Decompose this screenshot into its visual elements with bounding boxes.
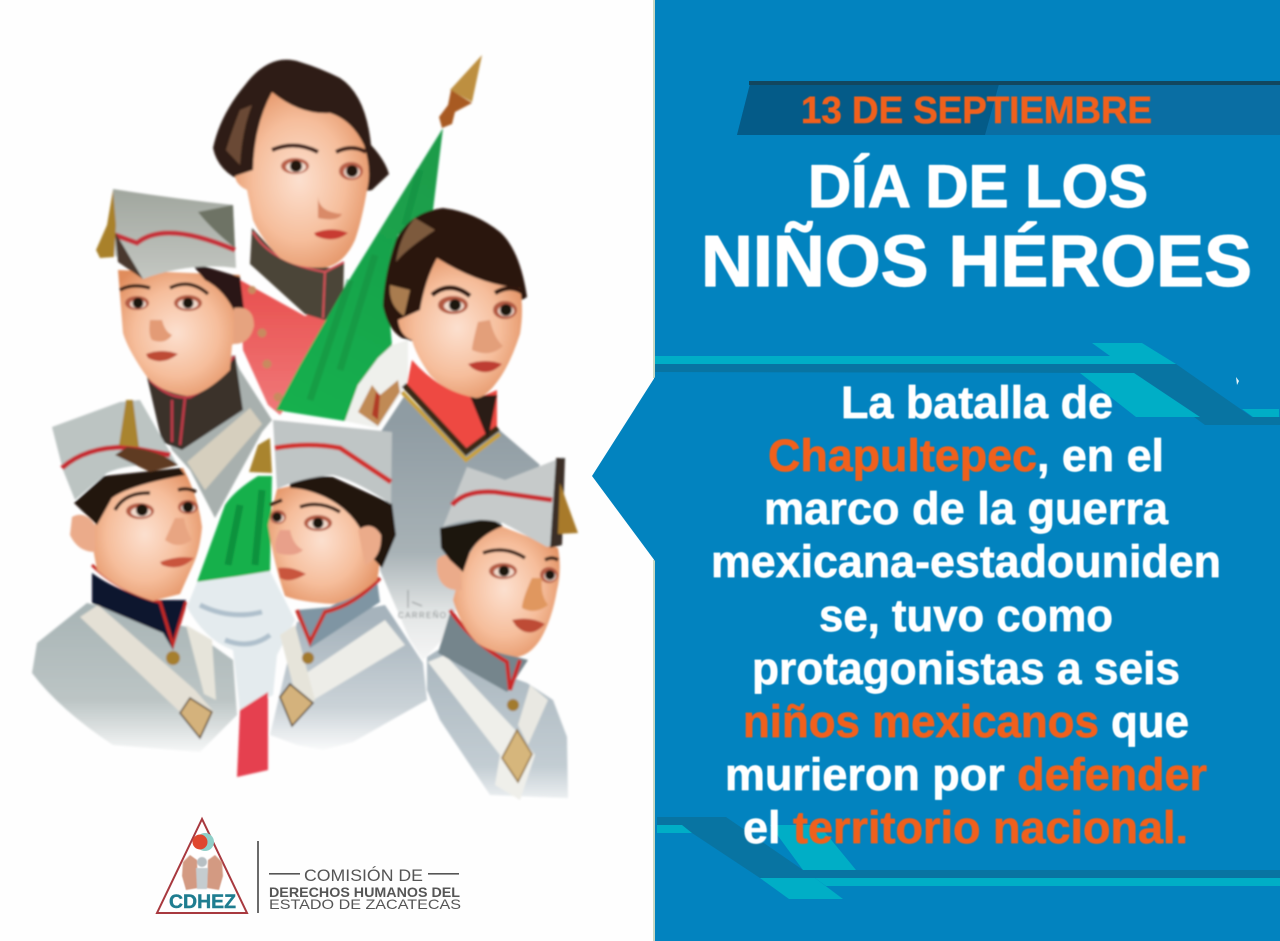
logo wordmark: CDHEZ bbox=[169, 892, 236, 913]
body text bbox=[711, 377, 1221, 853]
organisation name: DERECHOS HUMANOS DEL bbox=[269, 884, 460, 900]
tassel bbox=[119, 400, 139, 447]
callout arrow pointing to the portrait bbox=[592, 377, 655, 561]
body text: se, tuvo como bbox=[819, 590, 1113, 641]
body text: Chapultepec, en el bbox=[768, 430, 1164, 481]
body text: marco de la guerra bbox=[764, 483, 1169, 534]
date text: 13 DE SEPTIEMBRE bbox=[801, 90, 1152, 132]
figure: upper left cadet bbox=[96, 189, 272, 518]
green cloth bbox=[197, 476, 272, 582]
face bbox=[92, 468, 202, 601]
nose and mouth bbox=[275, 530, 303, 555]
brass button bbox=[507, 699, 519, 711]
nose and mouth bbox=[318, 196, 342, 219]
nose and mouth bbox=[472, 320, 503, 353]
illustration: the six cadets with the Mexican flag bbox=[32, 55, 578, 800]
figure: top centre cadet bbox=[213, 60, 389, 415]
logo: CDHEZ triangle bbox=[157, 819, 247, 913]
hands sheltering a person bbox=[182, 855, 223, 890]
body text: mexicana-estadouniden bbox=[711, 536, 1221, 587]
hair bbox=[213, 60, 389, 210]
face bbox=[235, 92, 369, 268]
hair bbox=[74, 468, 185, 525]
body text: murieron por defender bbox=[725, 749, 1207, 800]
green cloth bbox=[276, 128, 443, 421]
figure: lower left cadet bbox=[32, 400, 237, 752]
face bbox=[118, 270, 240, 396]
figure: lower right cadet bbox=[427, 457, 578, 800]
body bbox=[270, 605, 427, 750]
face bbox=[268, 477, 380, 604]
body bbox=[150, 355, 272, 518]
eyes and brows bbox=[483, 550, 558, 560]
collar bbox=[438, 613, 528, 692]
organisation name: COMISIÓN DE bbox=[304, 866, 423, 885]
eyes and brows bbox=[432, 288, 522, 296]
signature: CARREÑO bbox=[398, 611, 446, 620]
tassel bbox=[249, 438, 272, 473]
eyes and brows bbox=[120, 284, 208, 294]
eagle emblem bbox=[358, 380, 400, 426]
title: NIÑOS HÉROES bbox=[701, 221, 1252, 302]
collar bbox=[147, 355, 243, 450]
body bbox=[427, 650, 568, 798]
left panel: white background bbox=[0, 0, 654, 941]
flag: lower green, white and red section bbox=[187, 476, 295, 777]
buckle diamond bbox=[280, 684, 313, 726]
red cloth bbox=[237, 692, 268, 777]
white cloth bbox=[345, 340, 408, 428]
body text: niños mexicanos que bbox=[743, 696, 1189, 747]
body bbox=[32, 603, 237, 752]
logo divider bbox=[257, 841, 259, 913]
navy collar bbox=[92, 573, 186, 650]
title bbox=[701, 153, 1252, 302]
body text: La batalla de bbox=[841, 377, 1113, 428]
red coat bbox=[240, 280, 345, 415]
hair bbox=[290, 476, 396, 568]
organisation name bbox=[269, 866, 461, 912]
hair bbox=[190, 262, 244, 315]
tassel bbox=[96, 190, 116, 258]
sash bbox=[428, 655, 535, 800]
logo sun mark bbox=[192, 833, 214, 851]
signature bbox=[398, 590, 446, 620]
ear bbox=[358, 526, 381, 565]
brass button bbox=[302, 652, 314, 664]
flag: upper green and white section bbox=[276, 55, 482, 428]
buckle diamond bbox=[180, 698, 212, 738]
red collar bbox=[406, 360, 497, 448]
white cloth bbox=[187, 571, 295, 712]
lower decorative stripes bbox=[657, 817, 1280, 899]
sash bbox=[80, 605, 214, 738]
figure: lower centre cadet bbox=[249, 420, 427, 750]
collar bbox=[297, 580, 380, 648]
hair bbox=[383, 208, 527, 345]
face bbox=[398, 258, 522, 398]
hat bbox=[52, 400, 178, 500]
right panel: blue background bbox=[654, 0, 1280, 941]
ear bbox=[437, 555, 462, 590]
eyes and brows bbox=[272, 145, 366, 152]
nose and mouth bbox=[149, 320, 172, 342]
sash bbox=[296, 620, 405, 705]
spear tip bbox=[450, 55, 482, 102]
face bbox=[453, 522, 560, 657]
body text: el territorio nacional. bbox=[743, 802, 1188, 853]
brass button bbox=[166, 651, 180, 665]
hat bbox=[443, 457, 564, 547]
title: DÍA DE LOS bbox=[808, 153, 1148, 220]
buckle diamond bbox=[502, 730, 532, 782]
triangle frame bbox=[157, 819, 247, 913]
eyes and brows bbox=[270, 500, 340, 512]
upper decorative stripes bbox=[655, 343, 1280, 425]
sash bbox=[187, 408, 262, 490]
organisation name: ESTADO DE ZACATECAS bbox=[269, 896, 461, 912]
tassel bbox=[558, 483, 578, 534]
hat bbox=[273, 420, 392, 504]
body text: protagonistas a seis bbox=[752, 643, 1180, 694]
body bbox=[380, 395, 540, 660]
ear bbox=[234, 308, 254, 344]
date ribbon bbox=[737, 81, 1280, 135]
ear bbox=[70, 515, 95, 552]
nose and mouth bbox=[165, 518, 192, 545]
hat bbox=[113, 189, 236, 279]
figure: upper right cadet bbox=[380, 208, 540, 660]
eyes and brows bbox=[115, 489, 196, 510]
nose and mouth bbox=[522, 578, 548, 611]
coat buttons bbox=[248, 286, 282, 402]
hair bbox=[440, 518, 503, 572]
collar bbox=[250, 228, 344, 320]
